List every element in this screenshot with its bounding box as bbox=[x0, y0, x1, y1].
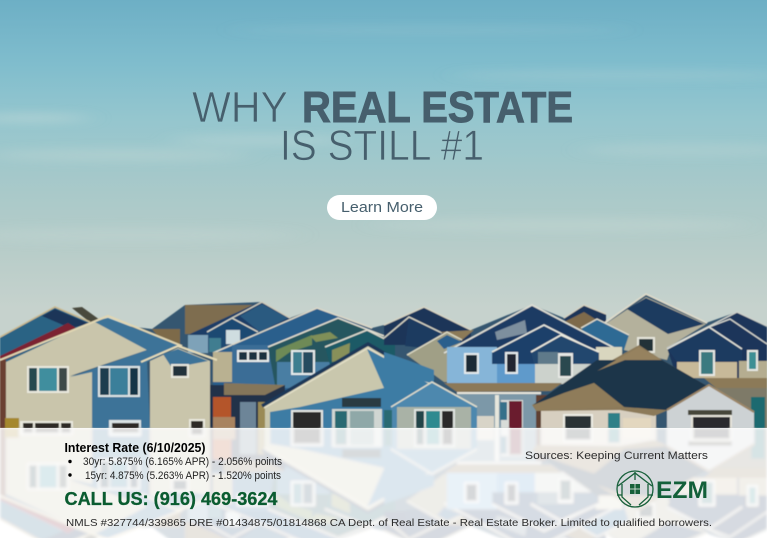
interest rate block bbox=[64, 440, 282, 482]
interest rate block: 15yr: 4.875% (5.263% APR) - 1.520% points bbox=[85, 470, 281, 482]
house: cream front-centre bbox=[262, 344, 435, 428]
title: REAL ESTATE bbox=[302, 83, 573, 132]
house: far-left back bbox=[0, 307, 100, 365]
learn more button: Learn More bbox=[341, 199, 423, 216]
porch with red door bbox=[444, 383, 562, 428]
interest rate block: Interest Rate (6/10/2025) bbox=[64, 440, 206, 455]
title: IS STILL #1 bbox=[280, 122, 484, 170]
houses photograph bbox=[0, 294, 767, 428]
footer photo reflection bbox=[0, 428, 767, 538]
house: blue centre bbox=[213, 308, 372, 392]
EZM logo bbox=[617, 471, 708, 507]
house: right navy gables bbox=[667, 312, 767, 428]
title: WHY bbox=[192, 83, 288, 132]
sky background bbox=[0, 0, 767, 428]
call us phone number: CALL US: (916) 469-3624 bbox=[64, 488, 278, 509]
learn more button bbox=[327, 195, 437, 220]
house: navy far-back centre-right bbox=[384, 307, 474, 384]
licensing disclaimer: NMLS #327744/339865 DRE #01434875/01814868 CA Dept. of Real Estate - Real Estate Broker. Limited to qualified borrowers. bbox=[66, 517, 712, 529]
house: green shaded gable bbox=[268, 318, 395, 388]
footer translucent panel bbox=[0, 428, 767, 538]
house: navy back centre bbox=[152, 302, 290, 353]
house: main navy gabled bbox=[444, 305, 622, 384]
icon: house in circle bbox=[617, 471, 653, 507]
skyline backing bbox=[0, 294, 767, 428]
interest rate block: 30yr: 5.875% (6.165% APR) - 2.056% points bbox=[83, 456, 282, 468]
EZM logo: EZM bbox=[656, 477, 708, 504]
house: small blue gable bbox=[384, 382, 477, 428]
title bbox=[192, 83, 573, 170]
sources note: Sources: Keeping Current Matters bbox=[525, 450, 709, 462]
house: cream front-left bbox=[0, 316, 217, 428]
house: beige back right bbox=[564, 294, 707, 360]
house: big brown roof bbox=[532, 345, 754, 428]
porch with orange fence and brown awning bbox=[210, 383, 285, 428]
